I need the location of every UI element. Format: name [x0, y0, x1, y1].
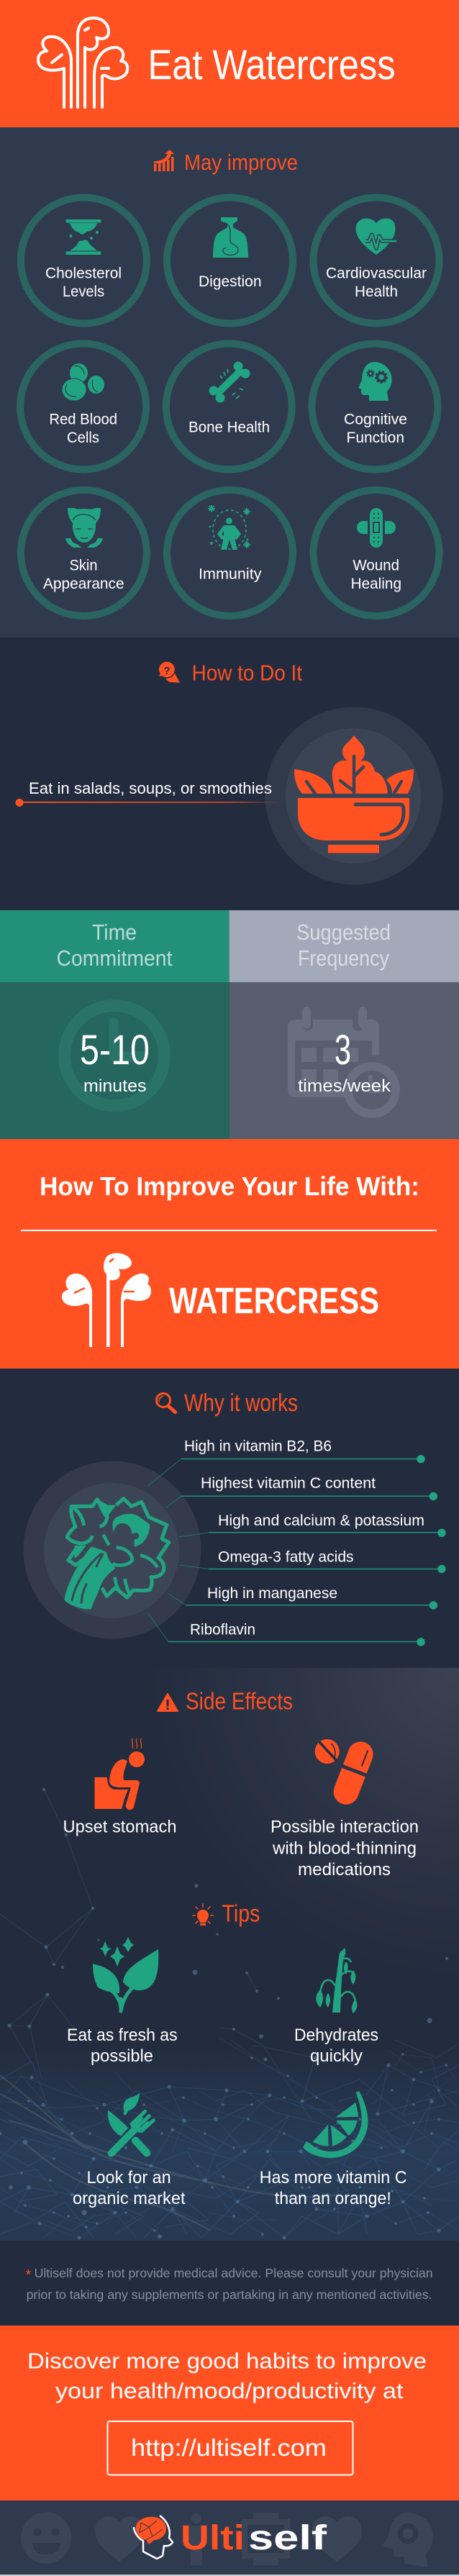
icon: torso with stomach	[213, 217, 248, 258]
icon: magnifier	[157, 1393, 176, 1412]
icon: pills	[315, 1738, 377, 1808]
ultiself logo	[134, 2516, 327, 2559]
network small nodes	[22, 2054, 446, 2234]
panel: time commitment	[0, 910, 230, 1139]
effect: upset stomach	[63, 1738, 177, 1837]
icon: question bubbles	[158, 661, 180, 683]
panel: why it works	[23, 1389, 446, 1646]
panel: tips	[67, 1900, 407, 2208]
leader dots	[417, 1455, 446, 1646]
label: Cognitive	[344, 410, 407, 427]
label: Cells	[67, 429, 99, 446]
icon: hourglass	[66, 219, 101, 255]
call to action text: your health/mood/productivity at	[55, 2378, 404, 2403]
panel: how to improve banner	[0, 1139, 459, 1369]
fact text	[184, 1438, 424, 1638]
icon: bone	[209, 361, 250, 403]
disclaimer: Ultiself does not provide medical advice. Please consult your physician	[35, 2266, 433, 2280]
tip text: Look for an	[86, 2168, 171, 2187]
icon: wilted plant	[316, 1948, 357, 2013]
tip text: Dehydrates	[294, 2026, 378, 2045]
benefit: red blood cells	[20, 344, 146, 469]
disclaimer	[26, 2266, 433, 2302]
step: eat in salads	[16, 779, 284, 807]
facts list	[148, 1438, 446, 1646]
value: 5-10	[80, 1027, 150, 1074]
network nodes	[0, 1788, 448, 2239]
wordmark: Ulti	[181, 2519, 245, 2557]
heading: Commitment	[56, 945, 173, 971]
disclaimer: prior to taking any supplements or partaking in any mentioned activities.	[27, 2287, 432, 2302]
benefit: cognitive function	[312, 344, 437, 469]
unit: times/week	[298, 1076, 391, 1096]
icon: heart pulse	[355, 219, 397, 255]
call to action text: Discover more good habits to improve	[27, 2349, 427, 2374]
label: Appearance	[43, 575, 124, 592]
cress illustration	[23, 1461, 201, 1639]
tip: organic market	[73, 2092, 186, 2208]
label: Health	[355, 283, 398, 300]
heading: How To Improve Your Life With:	[40, 1171, 419, 1201]
tip text: possible	[91, 2046, 153, 2066]
label: Immunity	[199, 566, 262, 583]
benefit: immunity	[167, 490, 293, 616]
panel: title banner	[0, 0, 459, 127]
fact text: Highest vitamin C content	[201, 1475, 376, 1492]
tip: more vitamin c	[260, 2091, 407, 2208]
heading: Frequency	[298, 945, 389, 971]
wordmark: WATERCRESS	[169, 1280, 379, 1321]
benefit: cardiovascular health	[314, 197, 439, 324]
panel: how to do it	[0, 638, 459, 910]
fact text: Omega-3 fatty acids	[218, 1549, 354, 1566]
effect text: with blood-thinning	[272, 1839, 417, 1859]
icon: question bubbles: ?	[163, 665, 171, 677]
icon: person on toilet	[95, 1738, 145, 1810]
leader lines	[148, 1459, 442, 1642]
wordmark: self	[248, 2519, 327, 2557]
fact text: High in manganese	[207, 1585, 337, 1602]
network texture lines, second layer	[0, 2038, 459, 2238]
heading: may improve	[154, 150, 298, 175]
panel: call to action	[0, 2326, 459, 2500]
label: Cholesterol	[45, 265, 122, 282]
label: Healing	[351, 575, 401, 592]
fact text: High and calcium & potassium	[218, 1513, 424, 1529]
wordmark	[181, 2519, 327, 2557]
benefit: digestion	[167, 197, 293, 324]
panel: side effects	[63, 1688, 419, 1879]
effect text: Upset stomach	[63, 1818, 177, 1837]
tip text: Has more vitamin C	[260, 2168, 407, 2187]
disclaimer: *	[26, 2267, 32, 2283]
heading text: Why it works	[184, 1389, 298, 1417]
icon: watercress outline	[38, 18, 127, 107]
panel: footer	[0, 2500, 459, 2576]
benefit: wound healing	[314, 490, 439, 616]
icon: salad bowl	[294, 735, 414, 853]
fact text: Riboflavin	[190, 1622, 255, 1638]
heading text: Tips	[222, 1900, 260, 1927]
icon: watercress solid	[62, 1253, 151, 1347]
tip text: organic market	[73, 2189, 186, 2208]
icon: watercress bunch	[64, 1499, 169, 1609]
fact text: High in vitamin B2, B6	[184, 1438, 332, 1455]
unit: minutes	[83, 1076, 147, 1096]
tip text: Eat as fresh as	[67, 2026, 178, 2045]
icon: bandage	[357, 508, 396, 548]
label: Wound	[353, 557, 399, 574]
icon: warning triangle	[158, 1694, 178, 1711]
heading text: May improve	[184, 150, 298, 175]
label: Cardiovascular	[326, 265, 427, 282]
heading text: Side Effects	[186, 1688, 293, 1715]
heading: side effects	[158, 1688, 293, 1715]
label: Skin	[69, 557, 98, 574]
salad illustration	[265, 707, 443, 885]
tip text: quickly	[310, 2046, 363, 2066]
icon: light bulb	[193, 1904, 213, 1926]
url button: http://ultiself.com	[131, 2434, 327, 2461]
icon: brain head	[134, 2516, 173, 2559]
url button	[108, 2421, 353, 2475]
heading: how to do it	[158, 661, 302, 686]
heading: Time	[92, 920, 137, 945]
step: eat in salads: Eat in salads, soups, or smoothies	[29, 779, 272, 797]
label: Red Blood	[49, 410, 117, 427]
title: Eat Watercress	[148, 42, 396, 89]
label: Function	[347, 429, 404, 446]
benefit: bone health	[166, 344, 292, 469]
value: 3	[335, 1027, 351, 1074]
heading: tips	[193, 1900, 260, 1927]
heading: Suggested	[296, 920, 391, 945]
benefit: cholesterol levels	[21, 197, 147, 324]
label: Levels	[63, 283, 104, 300]
icon: knife, fork and leaf	[108, 2092, 153, 2154]
icon: head with gears	[358, 362, 392, 401]
background icons	[21, 2512, 433, 2567]
heading text: How to Do It	[192, 661, 302, 686]
tip: dehydrates quickly	[294, 1948, 378, 2066]
panel: side effects and tips backdrop	[0, 1668, 459, 2241]
icon: clock background	[65, 1006, 164, 1105]
effect text: medications	[298, 1860, 391, 1879]
icon: rising chart	[154, 150, 174, 171]
label: Digestion	[199, 273, 262, 290]
icon: blood cells	[62, 363, 104, 401]
icon: sparkling leaves	[93, 1937, 158, 2011]
icon: calendar background	[288, 1007, 396, 1114]
panel: suggested frequency	[230, 910, 459, 1139]
effect: blood thinning interaction	[271, 1738, 419, 1879]
tip text: than an orange!	[275, 2189, 391, 2208]
icon: protected body	[208, 505, 250, 550]
label: Bone Health	[188, 419, 270, 436]
heading: why it works	[157, 1389, 298, 1417]
icon: face with hands	[65, 508, 103, 548]
benefit: skin appearance	[21, 490, 147, 616]
panel: may improve	[0, 127, 459, 638]
effect text: Possible interaction	[271, 1818, 419, 1837]
tip: eat fresh	[67, 1937, 178, 2066]
icon: citrus slice	[303, 2091, 368, 2158]
network strands	[0, 2075, 338, 2231]
network texture lines	[0, 1790, 459, 2238]
